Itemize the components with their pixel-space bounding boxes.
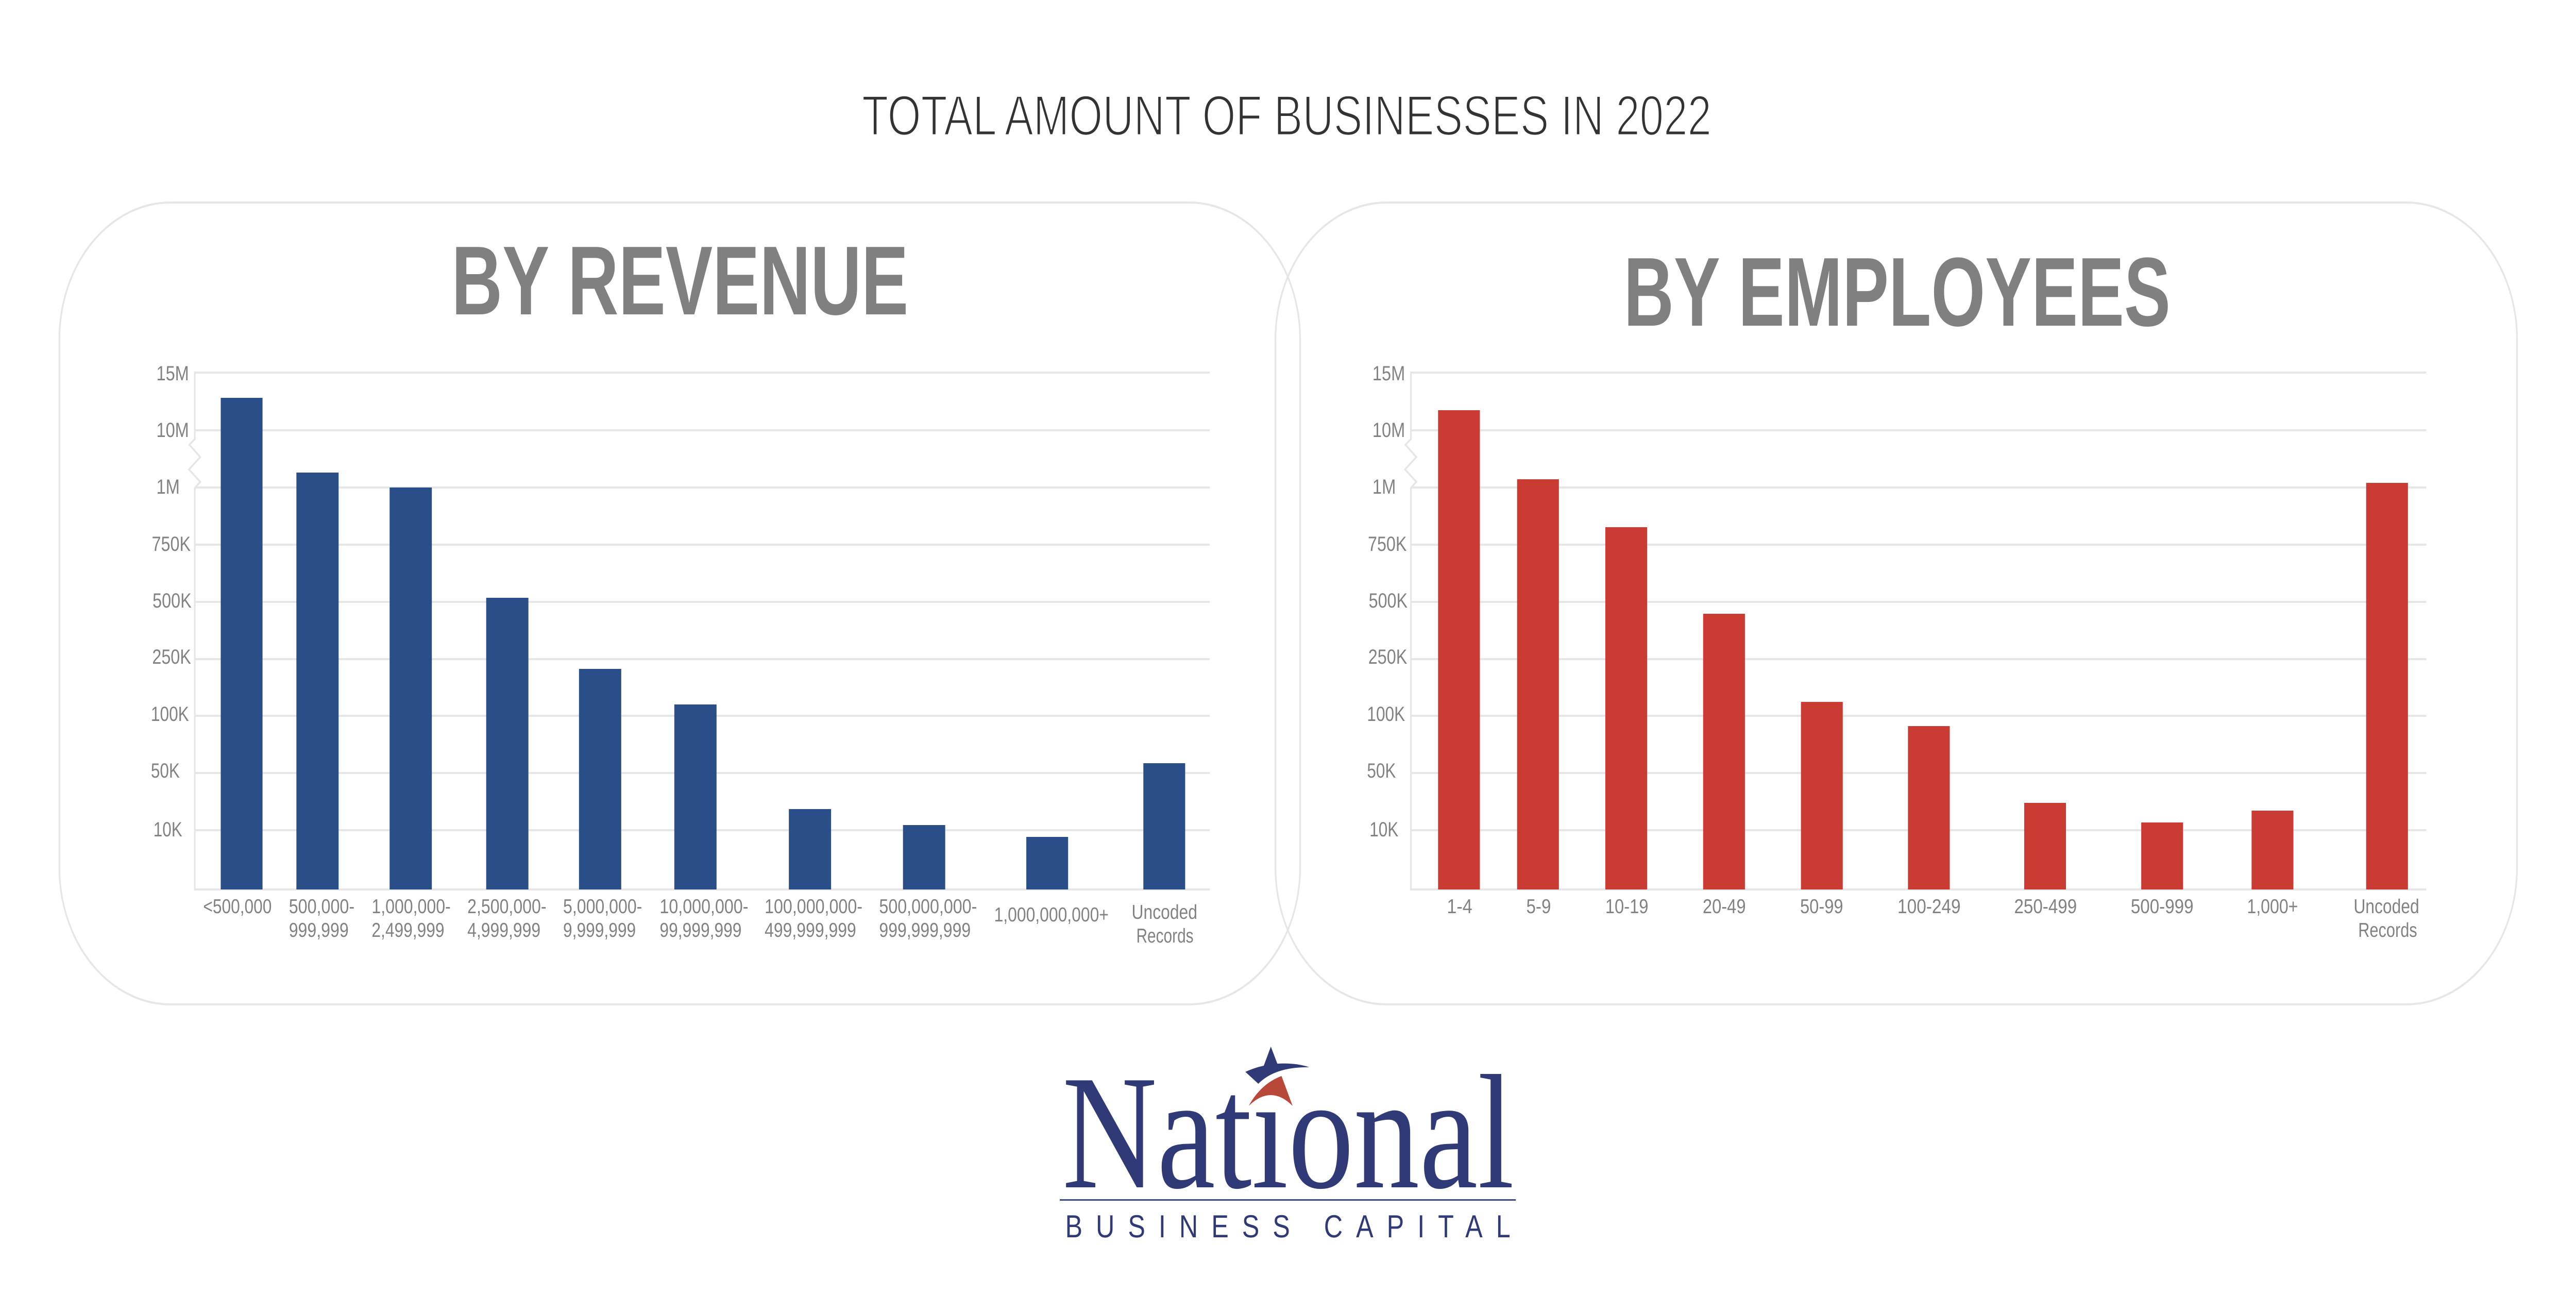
- x-axis labels: employees: Records: [2358, 919, 2417, 942]
- x-axis labels: employees: Uncoded: [2353, 896, 2419, 918]
- gridlines and axis: [1405, 372, 2427, 890]
- panel: by revenue: [59, 203, 1300, 1004]
- x-axis labels: employees: 250-499: [2014, 896, 2077, 918]
- y-axis labels: [151, 362, 192, 841]
- y-axis labels: 500K: [152, 590, 192, 612]
- y-axis labels: 10M: [156, 419, 189, 442]
- y-axis labels: 750K: [1368, 533, 1407, 556]
- y-axis labels: 10K: [154, 818, 182, 841]
- x-axis labels: revenue: 99,999,999: [659, 919, 741, 942]
- y-axis labels: 750K: [152, 533, 191, 556]
- y-axis labels: 50K: [151, 760, 180, 782]
- y-axis labels: 500K: [1369, 590, 1408, 612]
- y-axis labels: 250K: [152, 646, 191, 668]
- logo divider: [1060, 1199, 1516, 1201]
- icon: star red lower: [1249, 1076, 1293, 1106]
- y-axis labels: 10K: [1369, 818, 1398, 841]
- mask over the i dot: [1256, 1062, 1287, 1110]
- x-axis labels: revenue: 100,000,000-: [765, 896, 862, 918]
- x-axis labels: employees: 1-4: [1447, 896, 1472, 918]
- y-axis labels: [1367, 362, 1408, 841]
- x-axis labels: revenue: Uncoded: [1132, 901, 1197, 923]
- bar chart: by employees: [1367, 362, 2427, 942]
- x-axis labels: revenue: 10,000,000-: [659, 896, 748, 918]
- x-axis labels: revenue: 2,500,000-: [467, 896, 547, 918]
- bars: revenue: [221, 398, 1185, 889]
- x-axis labels: revenue: 2,499,999: [371, 919, 445, 942]
- x-axis labels: revenue: Records: [1136, 925, 1194, 947]
- x-axis labels: revenue: 499,999,999: [765, 919, 856, 942]
- bar chart: by revenue: [151, 362, 1210, 947]
- heading: by revenue: BY REVENUE: [451, 226, 908, 335]
- y-axis labels: 100K: [151, 703, 189, 726]
- icon: star navy upper: [1245, 1047, 1309, 1084]
- logo: National Business Capital: [1060, 1042, 1516, 1245]
- y-axis labels: 100K: [1367, 703, 1405, 726]
- y-axis labels: 1M: [156, 476, 180, 498]
- y-axis labels: 10M: [1372, 419, 1405, 442]
- panel outline: by revenue: [59, 203, 1300, 1004]
- heading: by employees: BY EMPLOYEES: [1624, 238, 2171, 347]
- bars: employees: [1438, 410, 2408, 889]
- y-axis labels: 50K: [1367, 760, 1396, 782]
- gridlines and axis: [189, 372, 1210, 890]
- logo wordmark: National: [1062, 1042, 1514, 1223]
- x-axis labels: employees: 5-9: [1527, 896, 1551, 918]
- x-axis labels: revenue: <500,000: [203, 896, 272, 918]
- y-axis labels: 1M: [1372, 476, 1396, 498]
- panel: by employees: [1276, 203, 2517, 1004]
- x-axis labels: employees: 10-19: [1605, 896, 1648, 918]
- x-axis labels: revenue: 500,000,000-: [879, 896, 977, 918]
- x-axis labels: revenue: 999,999: [289, 919, 349, 942]
- y-axis labels: 15M: [1372, 362, 1405, 385]
- x-axis labels: revenue: 5,000,000-: [563, 896, 642, 918]
- logo tagline: BUSINESS CAPITAL: [1065, 1209, 1511, 1245]
- x-axis labels: revenue: 4,999,999: [467, 919, 540, 942]
- x-axis labels: revenue: 999,999,999: [879, 919, 971, 942]
- x-axis labels: revenue: 1,000,000,000+: [994, 904, 1109, 926]
- y-axis labels: 15M: [156, 362, 189, 385]
- x-axis labels: employees: 50-99: [1800, 896, 1843, 918]
- x-axis labels: employees: 500-999: [2131, 896, 2194, 918]
- x-axis labels: employees: 20-49: [1703, 896, 1746, 918]
- x-axis labels: employees: 100-249: [1897, 896, 1961, 918]
- panel outline: by employees: [1276, 203, 2517, 1004]
- x-axis labels: revenue: 9,999,999: [563, 919, 636, 942]
- y-axis labels: 250K: [1368, 646, 1408, 668]
- x-axis labels: revenue: 500,000-: [289, 896, 354, 918]
- x-axis labels: employees: 1,000+: [2247, 896, 2298, 918]
- title: TOTAL AMOUNT OF BUSINESSES IN 2022: [862, 84, 1711, 147]
- x-axis labels: revenue: 1,000,000-: [371, 896, 451, 918]
- x-axis labels: employees: [1447, 896, 2419, 942]
- x-axis labels: revenue: [203, 896, 1197, 947]
